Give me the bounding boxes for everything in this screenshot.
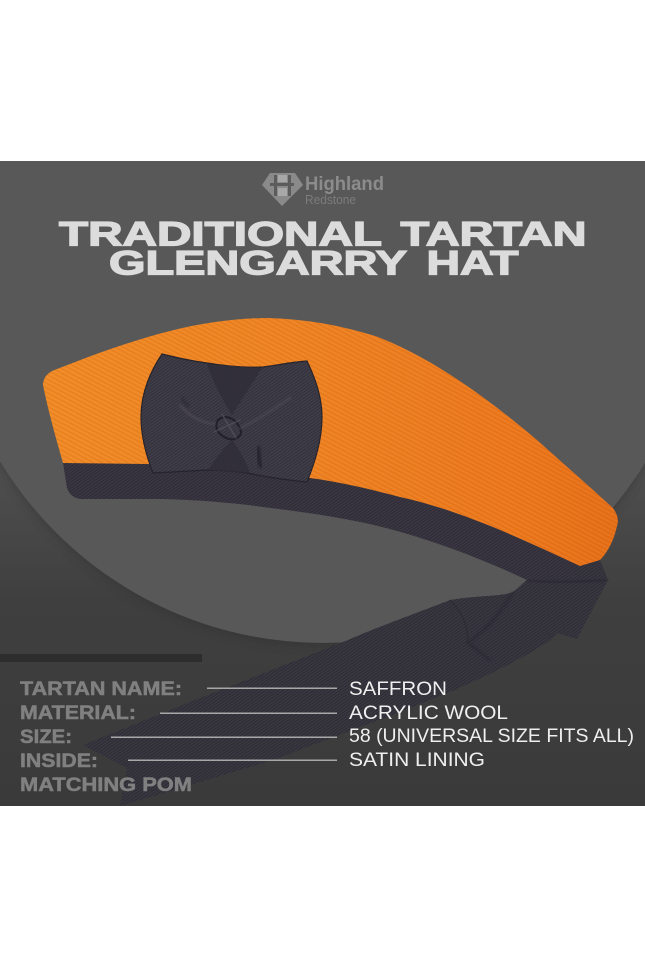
hat band	[63, 462, 600, 580]
spec row: matching pom: MATCHING POM	[20, 775, 192, 796]
bow folds and knot	[180, 364, 290, 473]
hat	[43, 318, 618, 806]
title: TARTAN	[400, 216, 586, 254]
hat orange body	[43, 318, 618, 566]
specification list	[20, 679, 634, 796]
spec row: tartan name: SAFFRON	[349, 679, 447, 700]
title: GLENGARRY	[109, 244, 407, 282]
spec row: inside	[20, 750, 485, 772]
spec row: size: SIZE:	[20, 727, 72, 748]
spec row: tartan name: TARTAN NAME:	[20, 679, 182, 700]
spec row: tartan name	[20, 679, 447, 700]
background panel	[0, 161, 645, 806]
logo wordmark: Highland	[305, 174, 384, 195]
title	[59, 216, 586, 282]
decorative bar	[0, 654, 202, 662]
background circle	[0, 459, 645, 643]
spec row: material: ACRYLIC WOOL	[349, 703, 508, 724]
spec row: material: MATERIAL:	[20, 703, 136, 724]
spec row: material	[20, 703, 508, 724]
spec row: size	[20, 726, 634, 748]
icon: diamond monogram	[262, 173, 303, 206]
spec row: inside: INSIDE:	[20, 751, 98, 772]
hat tail ribbon	[83, 560, 608, 806]
spec row: inside: SATIN LINING	[349, 750, 485, 771]
logo: Highland Redstone	[262, 173, 384, 207]
hat ribbon bow	[141, 354, 322, 482]
spec row: size: 58 (UNIVERSAL SIZE FITS ALL)	[349, 726, 634, 747]
title: HAT	[426, 244, 519, 282]
logo sub-wordmark: Redstone	[305, 192, 356, 207]
title: TRADITIONAL	[59, 216, 382, 254]
